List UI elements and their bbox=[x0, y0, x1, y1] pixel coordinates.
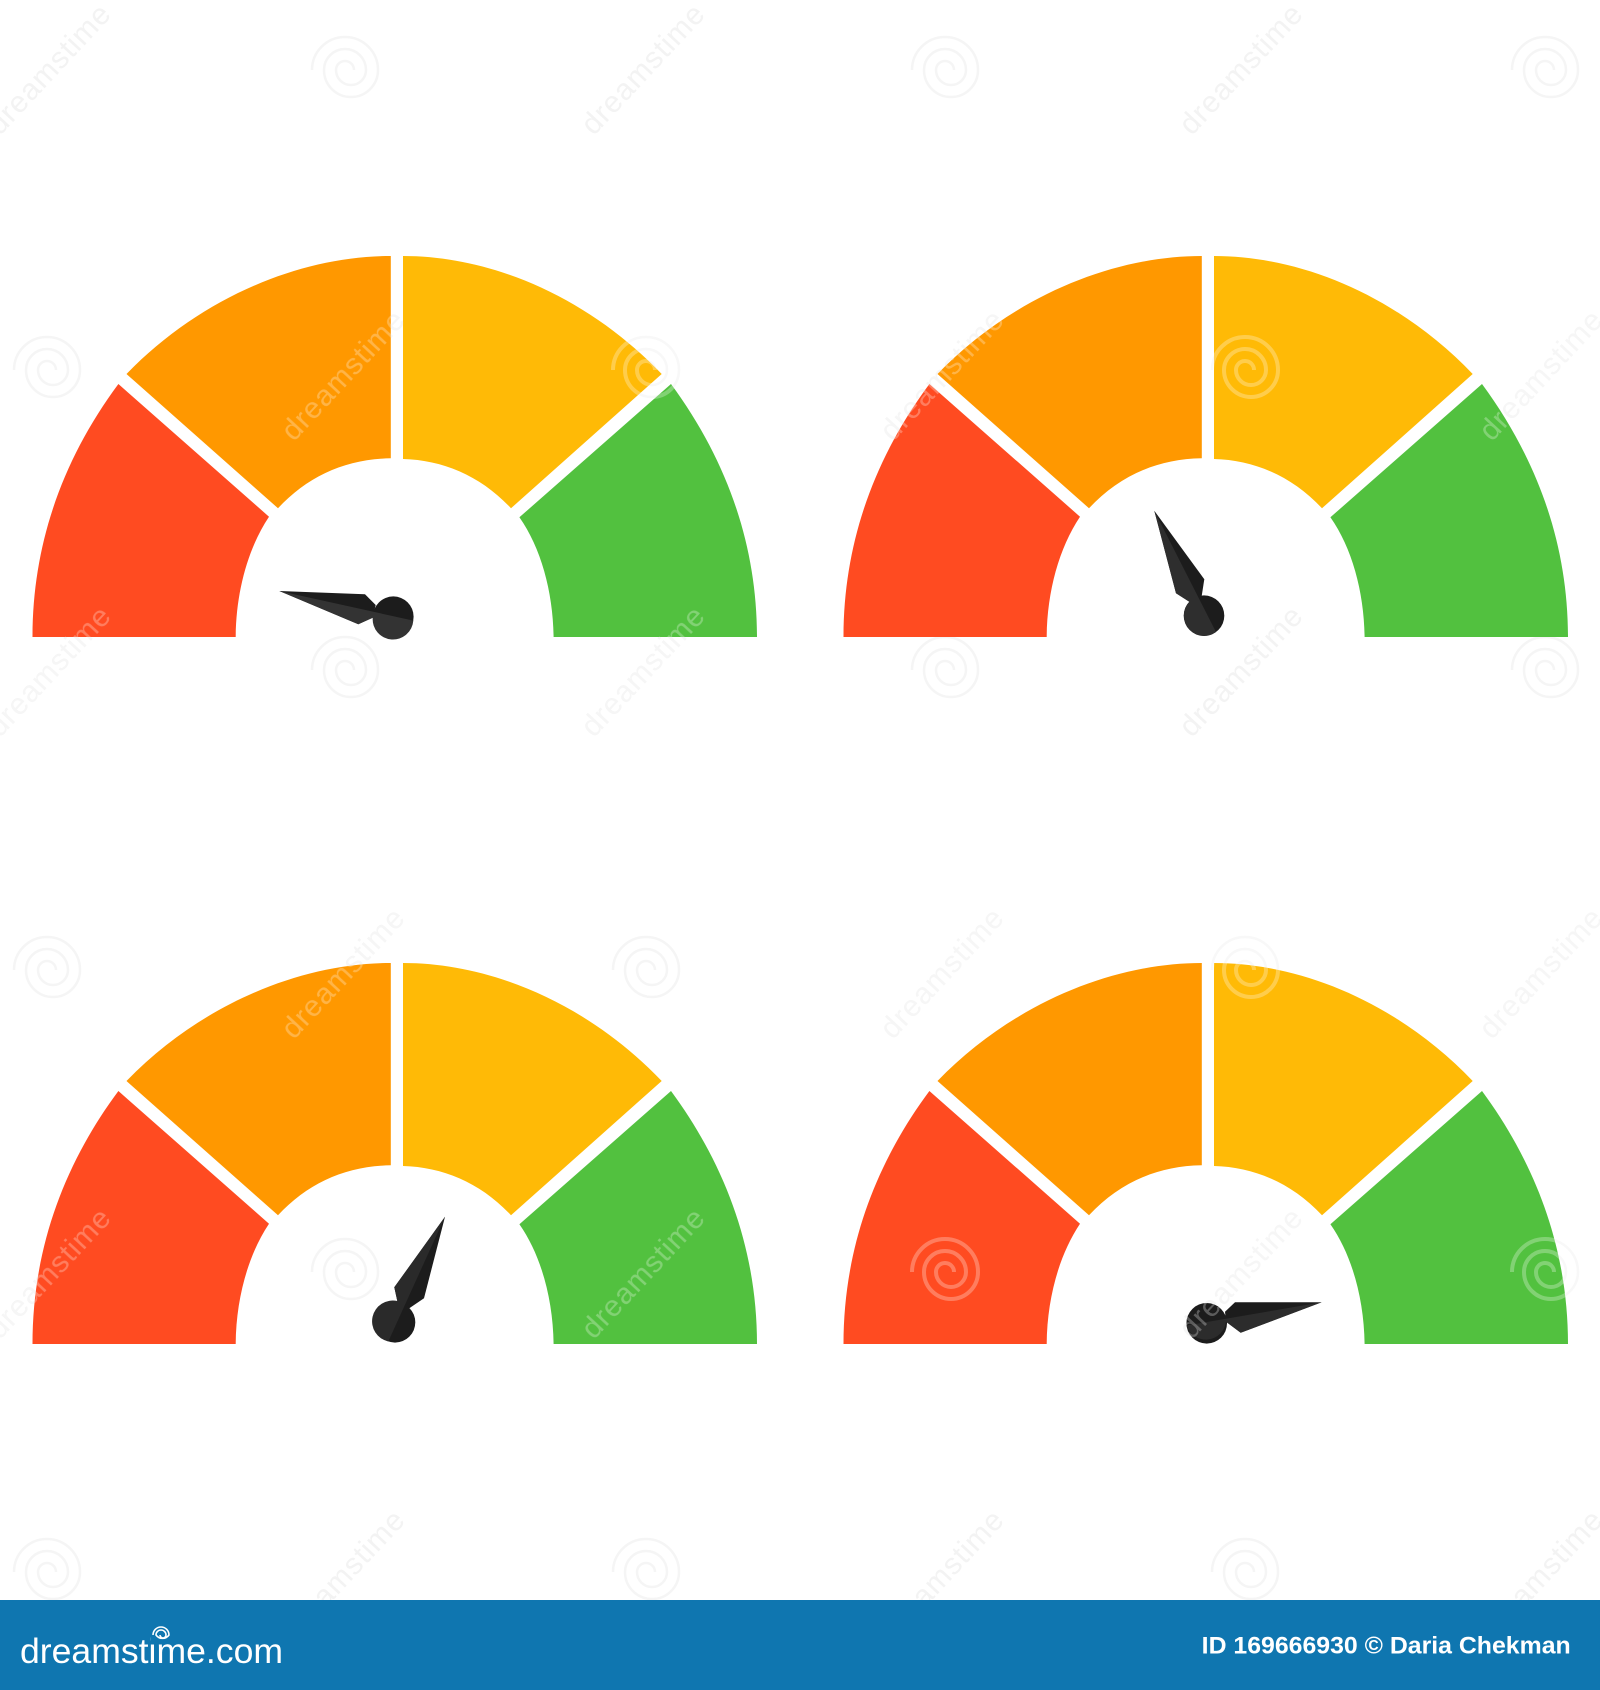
footer credit text: ID 169666930 © Daria Chekman bbox=[1202, 1632, 1571, 1659]
watermark layer on white background: dreamstime bbox=[275, 1504, 411, 1647]
watermark layer over gauges: dreamstime bbox=[1173, 1202, 1309, 1345]
watermark layer over gauges: dreamstime bbox=[874, 902, 1010, 1045]
watermark layer on white background: dreamstime bbox=[1173, 0, 1309, 141]
watermark layer on white background: dreamstime bbox=[1173, 600, 1309, 743]
footer logo text: dreamstime.com bbox=[20, 1632, 283, 1671]
watermark layer over gauges: dreamstime bbox=[575, 1202, 711, 1345]
gauge 1: top left bbox=[32, 256, 757, 640]
gauge 3 colour segments bbox=[32, 963, 757, 1344]
gauge 3 needle bbox=[372, 1217, 445, 1343]
watermark layer on white background: dreamstime bbox=[874, 902, 1010, 1045]
gauge 3: bottom left bbox=[32, 963, 757, 1344]
watermark layer on white background: dreamstime bbox=[575, 600, 711, 743]
watermark layer on white background: dreamstime bbox=[275, 304, 411, 447]
watermark layer on white background: dreamstime bbox=[575, 0, 711, 141]
watermark layer on white background: dreamstime bbox=[1173, 1202, 1309, 1345]
footer bar bbox=[0, 1600, 1600, 1690]
gauge 4 needle bbox=[1186, 1302, 1322, 1344]
gauge 2 colour segments bbox=[844, 256, 1568, 637]
watermark layer on white background: dreamstime bbox=[874, 304, 1010, 447]
watermark layer over gauges: dreamstime bbox=[275, 902, 411, 1045]
gauge 1 colour segments bbox=[32, 256, 757, 637]
gauge 2 needle bbox=[1154, 511, 1224, 636]
gauge 2: top right bbox=[844, 256, 1568, 637]
watermark layer over gauges: dreamstime bbox=[575, 600, 711, 743]
gauge 4: bottom right bbox=[844, 963, 1568, 1344]
watermark layer over gauges: dreamstime bbox=[874, 304, 1010, 447]
watermark layer over gauges bbox=[0, 304, 1600, 1345]
watermark layer on white background: dreamstime bbox=[575, 1202, 711, 1345]
watermark layer over gauges: dreamstime bbox=[275, 304, 411, 447]
icon: logo spiral bbox=[151, 1627, 171, 1641]
watermark layer on white background: dreamstime bbox=[874, 1504, 1010, 1647]
gauge 1 needle bbox=[279, 591, 414, 640]
watermark layer on white background: dreamstime bbox=[275, 902, 411, 1045]
gauge 4 colour segments bbox=[844, 963, 1568, 1344]
